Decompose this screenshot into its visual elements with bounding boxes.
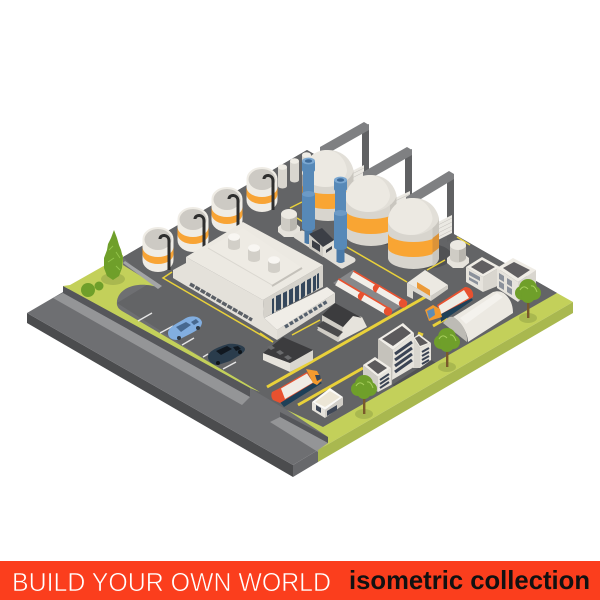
factory roof — [186, 222, 323, 300]
silo 2 frame pipe — [363, 147, 412, 200]
pump left — [278, 209, 300, 237]
chimney platform — [296, 233, 353, 266]
silo 1 — [302, 150, 354, 221]
bush — [81, 282, 104, 297]
quonset hangar — [443, 291, 513, 342]
blue car — [168, 316, 202, 340]
building right annex — [413, 334, 431, 368]
silo ground shadows — [310, 195, 452, 392]
yellow road markings — [163, 202, 470, 405]
tree right — [515, 279, 541, 323]
banner collection label: isometric collection — [349, 565, 590, 595]
shed with gable — [317, 303, 367, 342]
ground: plant plot — [117, 150, 557, 427]
storage tank 1 — [142, 227, 174, 272]
isometric scene — [27, 122, 573, 477]
tree middle — [434, 328, 460, 372]
poplar tree — [101, 230, 125, 285]
silo 3 ladder — [436, 215, 452, 241]
kerb and pavement: right — [270, 412, 328, 452]
banner slogan: BUILD YOUR OWN WORLD — [12, 567, 331, 597]
office block A — [466, 257, 500, 292]
parking bay lines — [138, 313, 236, 369]
lawn side face — [318, 302, 573, 462]
building tall tower — [378, 323, 414, 385]
dark car — [208, 344, 245, 365]
small control house — [309, 228, 334, 257]
warehouse dark roof — [263, 337, 313, 372]
factory main building — [173, 222, 335, 340]
storage tank 2 — [178, 207, 208, 252]
silo 1 ladder — [350, 165, 364, 186]
city tall building cluster — [363, 323, 431, 392]
silo 2 — [346, 175, 396, 246]
silo 2 ladder — [393, 191, 410, 213]
factory annex — [264, 287, 335, 340]
small white cylinders — [278, 152, 311, 188]
pump right — [447, 240, 469, 268]
silo 3 frame pipe — [406, 171, 454, 242]
roof vent 2 — [248, 244, 260, 262]
building left annex — [363, 357, 391, 392]
lawn: right strip — [287, 293, 573, 450]
tanker truck top — [425, 287, 473, 322]
storage tank 3 — [212, 187, 242, 232]
silo 3 — [388, 198, 439, 269]
capsule tank — [352, 271, 381, 293]
storage tank 4 — [246, 167, 278, 212]
blue chimney 2 — [334, 177, 347, 263]
factory right wall — [263, 265, 323, 318]
lawn: left strip — [63, 255, 260, 392]
kerb and pavement: main — [53, 286, 250, 405]
guard booth — [312, 388, 343, 418]
tanker storage bay — [333, 270, 408, 316]
silo 1 frame pipe — [320, 122, 369, 174]
roof raised panel — [208, 228, 302, 286]
banner — [0, 561, 600, 600]
roof vent 1 — [228, 233, 240, 250]
roof vent 3 — [268, 256, 280, 273]
orange loading box — [407, 270, 448, 301]
factory tall windows — [272, 273, 319, 314]
blue chimney 1 — [302, 158, 315, 244]
office block B — [497, 258, 536, 302]
factory small side windows — [190, 284, 252, 320]
tree front — [351, 375, 377, 419]
kerb: left lawn border — [123, 261, 162, 289]
factory left wall — [173, 257, 277, 340]
tanker truck bottom — [271, 369, 322, 407]
slab: road base — [27, 150, 557, 477]
